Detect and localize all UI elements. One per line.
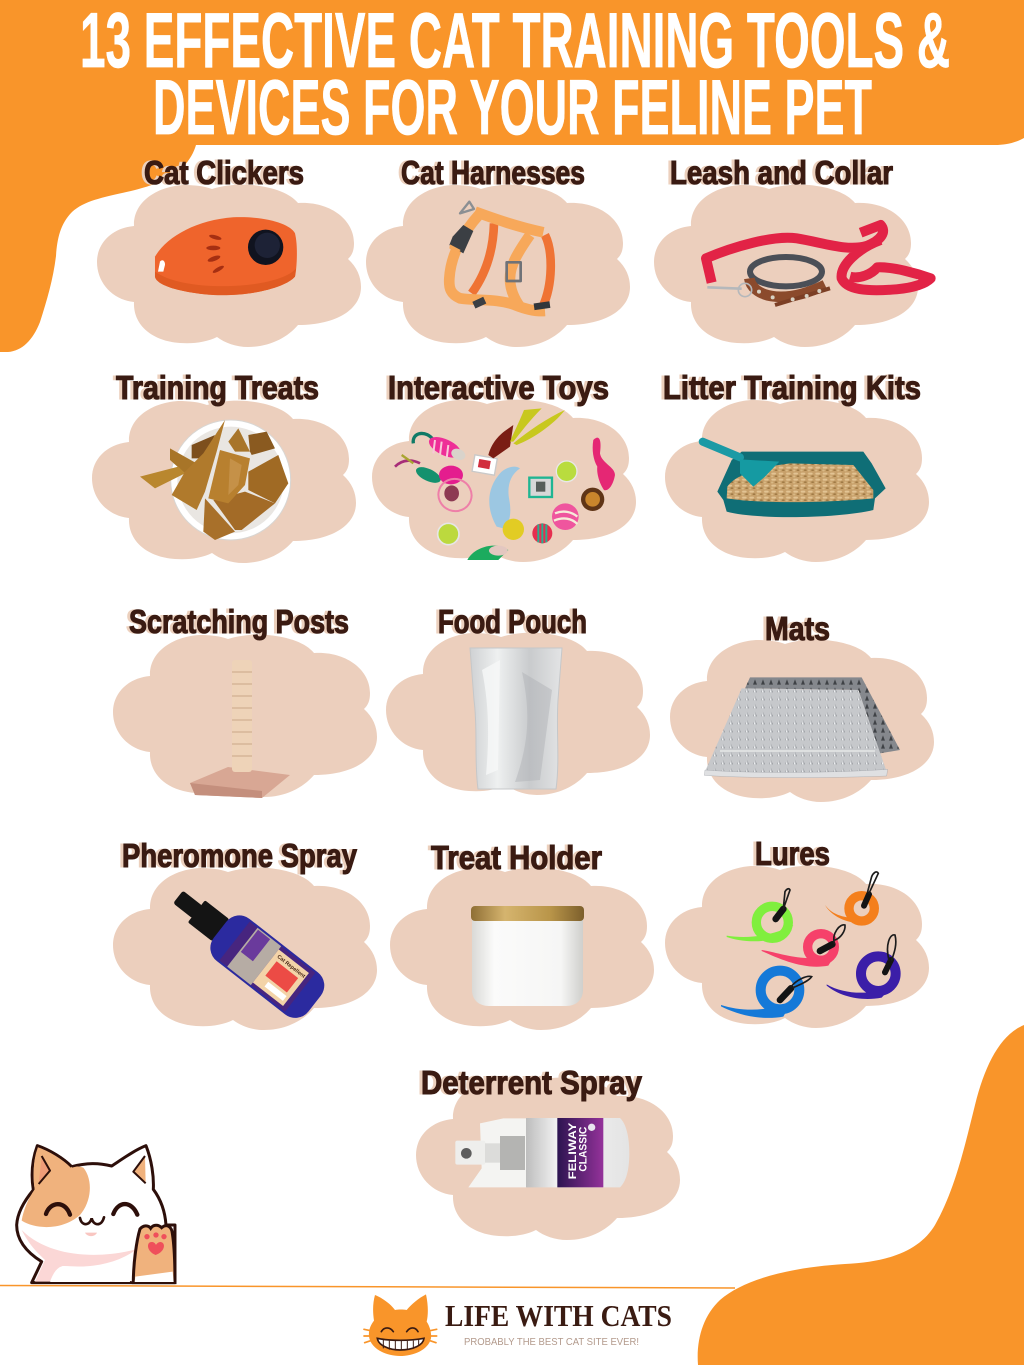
icon: litter tray and scoop <box>703 442 886 517</box>
panel: interactive toys <box>372 369 636 562</box>
panel: cat harnesses <box>366 154 630 347</box>
panel: lures <box>665 835 929 1028</box>
title <box>80 0 950 151</box>
panel: leash and collar <box>654 154 931 347</box>
panel: pheromone spray <box>113 837 377 1030</box>
label: cat harnesses: Cat Harnesses <box>401 154 585 191</box>
panel: deterrent spray <box>416 1064 680 1240</box>
panel: food pouch <box>386 603 650 795</box>
label: deterrent spray: Deterrent Spray <box>421 1064 643 1101</box>
label: mats: Mats <box>765 610 830 647</box>
panel: treat holder <box>390 839 654 1030</box>
footer rule <box>0 1286 735 1288</box>
label: interactive toys: Interactive Toys <box>388 369 609 406</box>
label: treat holder: Treat Holder <box>431 839 602 876</box>
icon: pheromone spray bottle <box>162 876 331 1025</box>
icon: assorted cat toys <box>395 408 615 560</box>
logo: grinning orange cat <box>364 1294 437 1356</box>
panel: scratching posts <box>113 603 377 798</box>
icon: Feliway spray bottle: FELIWAY <box>567 1123 579 1179</box>
logo wordmark: LIFE WITH CATS <box>445 1298 672 1333</box>
icon: bowl of treats <box>140 420 291 540</box>
panel: litter training kits <box>663 369 929 562</box>
panel: training treats <box>92 369 356 563</box>
icon: white jar with gold lid <box>471 906 584 1006</box>
label: training treats: Training Treats <box>116 369 319 406</box>
logo wordmark <box>445 1298 672 1348</box>
icon: five worm lures <box>721 872 896 1018</box>
label: cat clickers: Cat Clickers <box>144 154 304 191</box>
icon: scratching post <box>190 660 290 798</box>
icon: spiked mats <box>704 677 900 778</box>
icon: pheromone spray bottle: Cat Repellent <box>276 954 306 980</box>
label: food pouch: Food Pouch <box>438 603 587 640</box>
icon: red leash and brown collar <box>706 225 931 305</box>
background: bottom right orange blob <box>698 1025 1024 1365</box>
panel: mats <box>670 610 934 802</box>
icon: orange harness <box>449 202 551 311</box>
label: lures: Lures <box>755 835 830 872</box>
logo wordmark: PROBABLY THE BEST CAT SITE EVER! <box>464 1336 639 1348</box>
label: leash and collar: Leash and Collar <box>670 154 893 191</box>
icon: orange clicker <box>155 217 297 295</box>
icon: silver pouch <box>470 648 562 789</box>
icon: Feliway spray bottle <box>455 1118 629 1187</box>
icon: Feliway spray bottle: CLASSIC <box>578 1126 590 1172</box>
panel: cat clickers <box>97 154 361 347</box>
illustration: waving cat mascot <box>17 1146 175 1283</box>
label: litter training kits: Litter Training Kits <box>663 369 921 406</box>
label: scratching posts: Scratching Posts <box>129 603 349 640</box>
label: pheromone spray: Pheromone Spray <box>122 837 358 874</box>
background: top orange header and left blob <box>0 0 1024 352</box>
